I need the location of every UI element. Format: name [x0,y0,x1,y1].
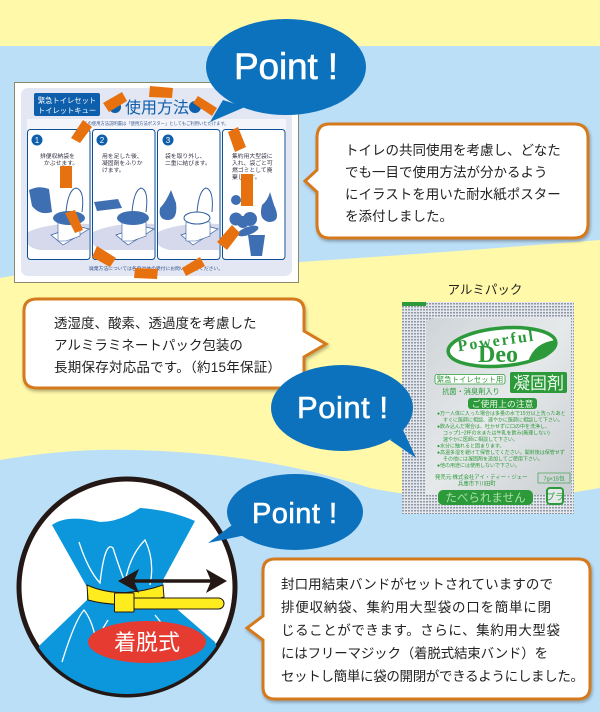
pack maker text: 発売元:株式会社アイ・ティー・ジェー [435,473,528,481]
pack recycle mark [546,488,564,504]
pack set label [435,374,505,396]
callout 3: にはフリーマジック（着脱式結束バンド）を [281,645,548,661]
illustration: bag with tie band [10,479,240,712]
pack set label: 緊急トイレセット用 [437,375,503,384]
callout 1: トイレの共同使用を考慮し、どなた [345,142,561,158]
blue bag [38,508,216,694]
pack recycle mark: プラ [546,492,564,502]
step 3: 3 [166,136,171,145]
pack caution heading: ご使用上の注意 [472,398,533,409]
point bubble 3: Point ! [252,498,337,530]
poster badge: トイレットキュー [38,106,96,115]
callout 2 [24,299,326,388]
pack caution text: ●万一人体に入った場合は多量の水で15分以上洗ったあと [437,410,566,417]
callout 3: セットし簡単に袋の開閉ができるようにしました。 [281,669,584,684]
pack caution text: その他には凝固剤を追加してご使用下さい。 [443,456,543,462]
step 2: けます。 [102,167,125,174]
pack logo: Powerful [457,328,535,355]
pack caution text: ●高温多湿を避けて保管してください。開封後は保管せず [437,449,565,456]
pack logo: Deo [478,342,518,368]
callout 3: 排便収納袋、集約用大型袋の口を簡単に閉 [281,600,551,615]
callout 2: 透湿度、酸素、透過度を考慮した [54,316,256,331]
point bubble 2: Point ! [297,390,388,425]
pack caution text: すぐに医師に相談、速やかに医師に相談して下さい。 [443,416,563,424]
pack weight box: 7g×15包 [544,474,565,482]
callout 3: 封口用結束バンドがセットされていますので [281,577,553,592]
step 2: 2 [100,136,105,145]
step 3: 袋を取り外し、 [165,152,206,160]
step 4: 棄します。 [232,173,260,181]
point bubble 2 [271,365,416,458]
pack set label: 抗菌・消臭剤入り [442,387,500,396]
callout 1: でも一目で使用方法が分かるよう [345,164,548,180]
step 1: 排便収納袋を [40,152,75,160]
arrow: double-headed [118,569,227,593]
bag creases [62,540,175,662]
poster badge: 緊急トイレセット [38,96,96,105]
background: top blue band [0,46,600,278]
callout 3: じることができます。さらに、集約用大型袋 [281,623,560,638]
callout 3 [247,559,590,699]
callout 1: にイラストを用いた耐水紙ポスター [345,187,561,202]
step 4: 燃ゴミとして廃 [232,166,273,174]
pack caution text: 速やかに医師に相談して下さい。 [443,436,518,443]
aluminium pack [402,302,574,514]
step 2: 用を足した後、 [102,152,143,160]
red label [88,621,206,663]
callout 1: を添付しました。 [345,209,453,224]
pack caution text: ●他の用途には使用しないで下さい。 [437,462,520,469]
label: aluminium pack: アルミパック [448,283,522,297]
pack not edible band [438,490,533,505]
poster subtitle: この使用方法説明書は「使用方法ポスター」としてもご利用いただけます。 [83,120,229,127]
pack not edible band: たべられません [445,492,526,504]
pack coagulant label: 凝固剤 [513,374,564,393]
step 3: 二重に結びます。 [165,159,211,167]
pack logo [447,323,557,371]
step 4: 入れ、袋ごと可 [232,159,273,167]
tie band [87,585,224,612]
step 1: 1 [35,136,40,145]
step 2 [92,130,155,260]
step 4: 集約用大型袋に [232,152,273,160]
step 1 [28,130,90,260]
poster footnote: 廃棄方法については各自治体の受付にお問い合わせください。 [89,265,223,272]
pack maker text: 兵庫市下川田町 [458,480,496,488]
poster title: 使用方法 [125,99,189,117]
point bubble 1: Point ! [234,46,338,87]
dashed orange circle [60,86,253,279]
pack caution text: コップ1~2杯の水または牛乳を飲み(無理しない) [443,430,550,436]
poster badge [34,93,100,116]
pack caution text: ●飲み込んだ場合は、吐かせずに口の中を洗浄し、 [437,423,550,430]
step 2: 凝固剤をふりか [102,159,143,167]
red label: 着脱式 [114,630,180,655]
step 4 [222,130,285,260]
pack caution text: ●水分に触れると固まります。 [437,442,505,450]
callout 2: アルミラミネートパック包装の [54,338,243,353]
background: bottom blue band [0,450,600,712]
callout 1 [305,124,588,238]
point bubble 3 [208,474,363,550]
step 1: かぶせます。 [44,160,78,167]
point bubble 1 [206,19,366,122]
step 3 [158,130,220,260]
pack weight box [538,473,570,483]
poster: usage instructions [14,82,298,282]
callout 2: 長期保存対応品です。（約15年保証） [54,360,281,375]
